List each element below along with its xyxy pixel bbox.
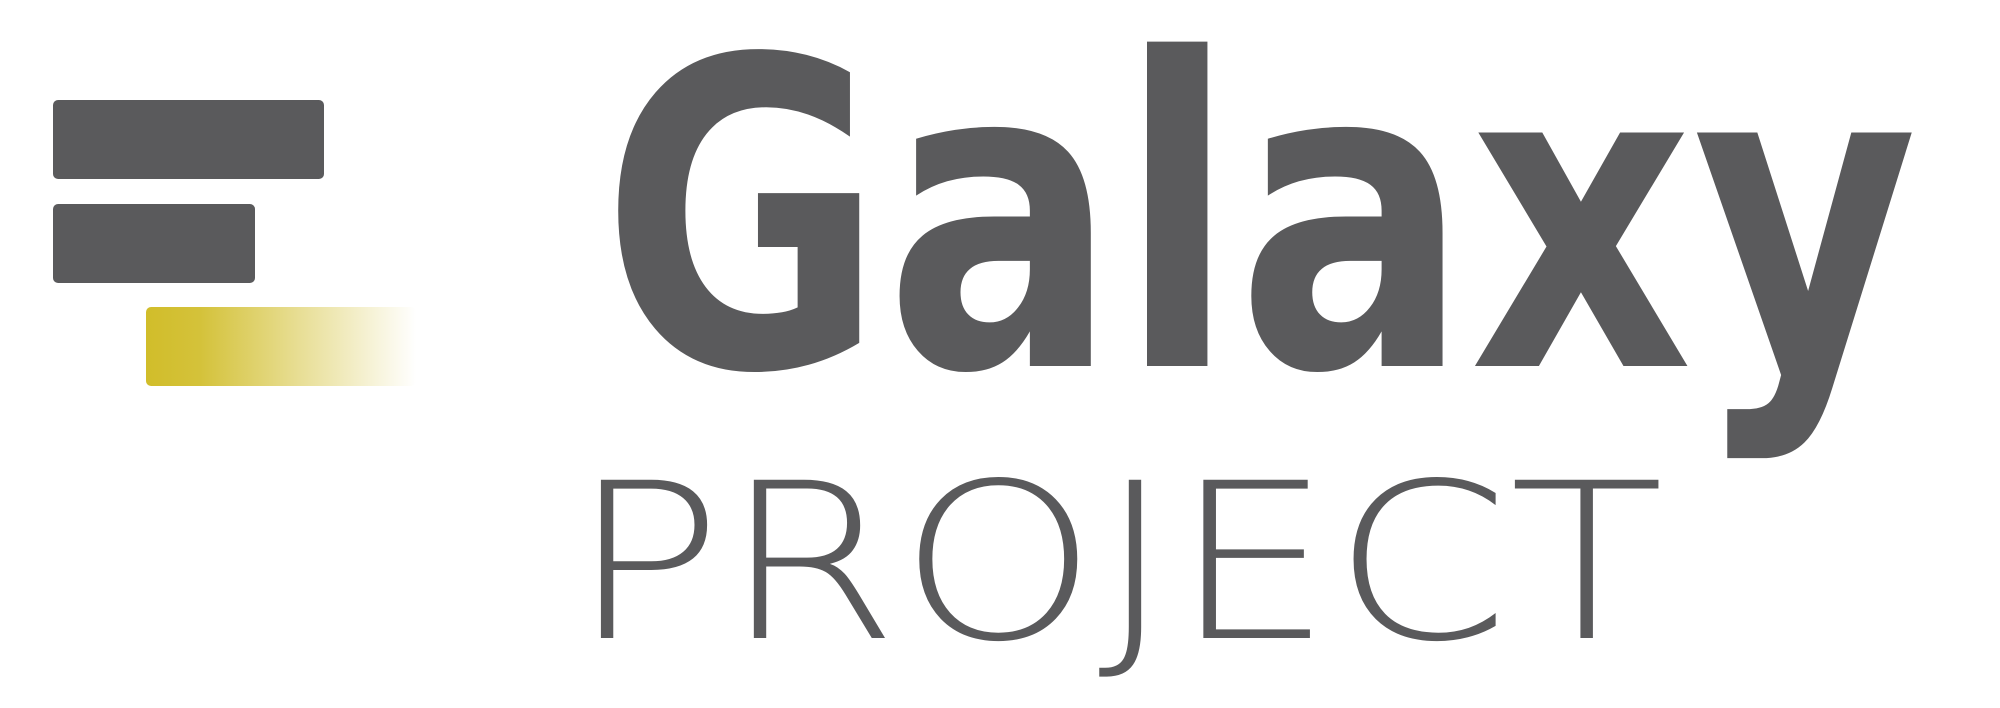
bar: middle gray bbox=[53, 204, 255, 283]
bar: top gray bbox=[53, 100, 324, 179]
bar: gold gradient bbox=[146, 307, 416, 386]
subtitle: PROJECT: PROJECT bbox=[570, 438, 1664, 690]
